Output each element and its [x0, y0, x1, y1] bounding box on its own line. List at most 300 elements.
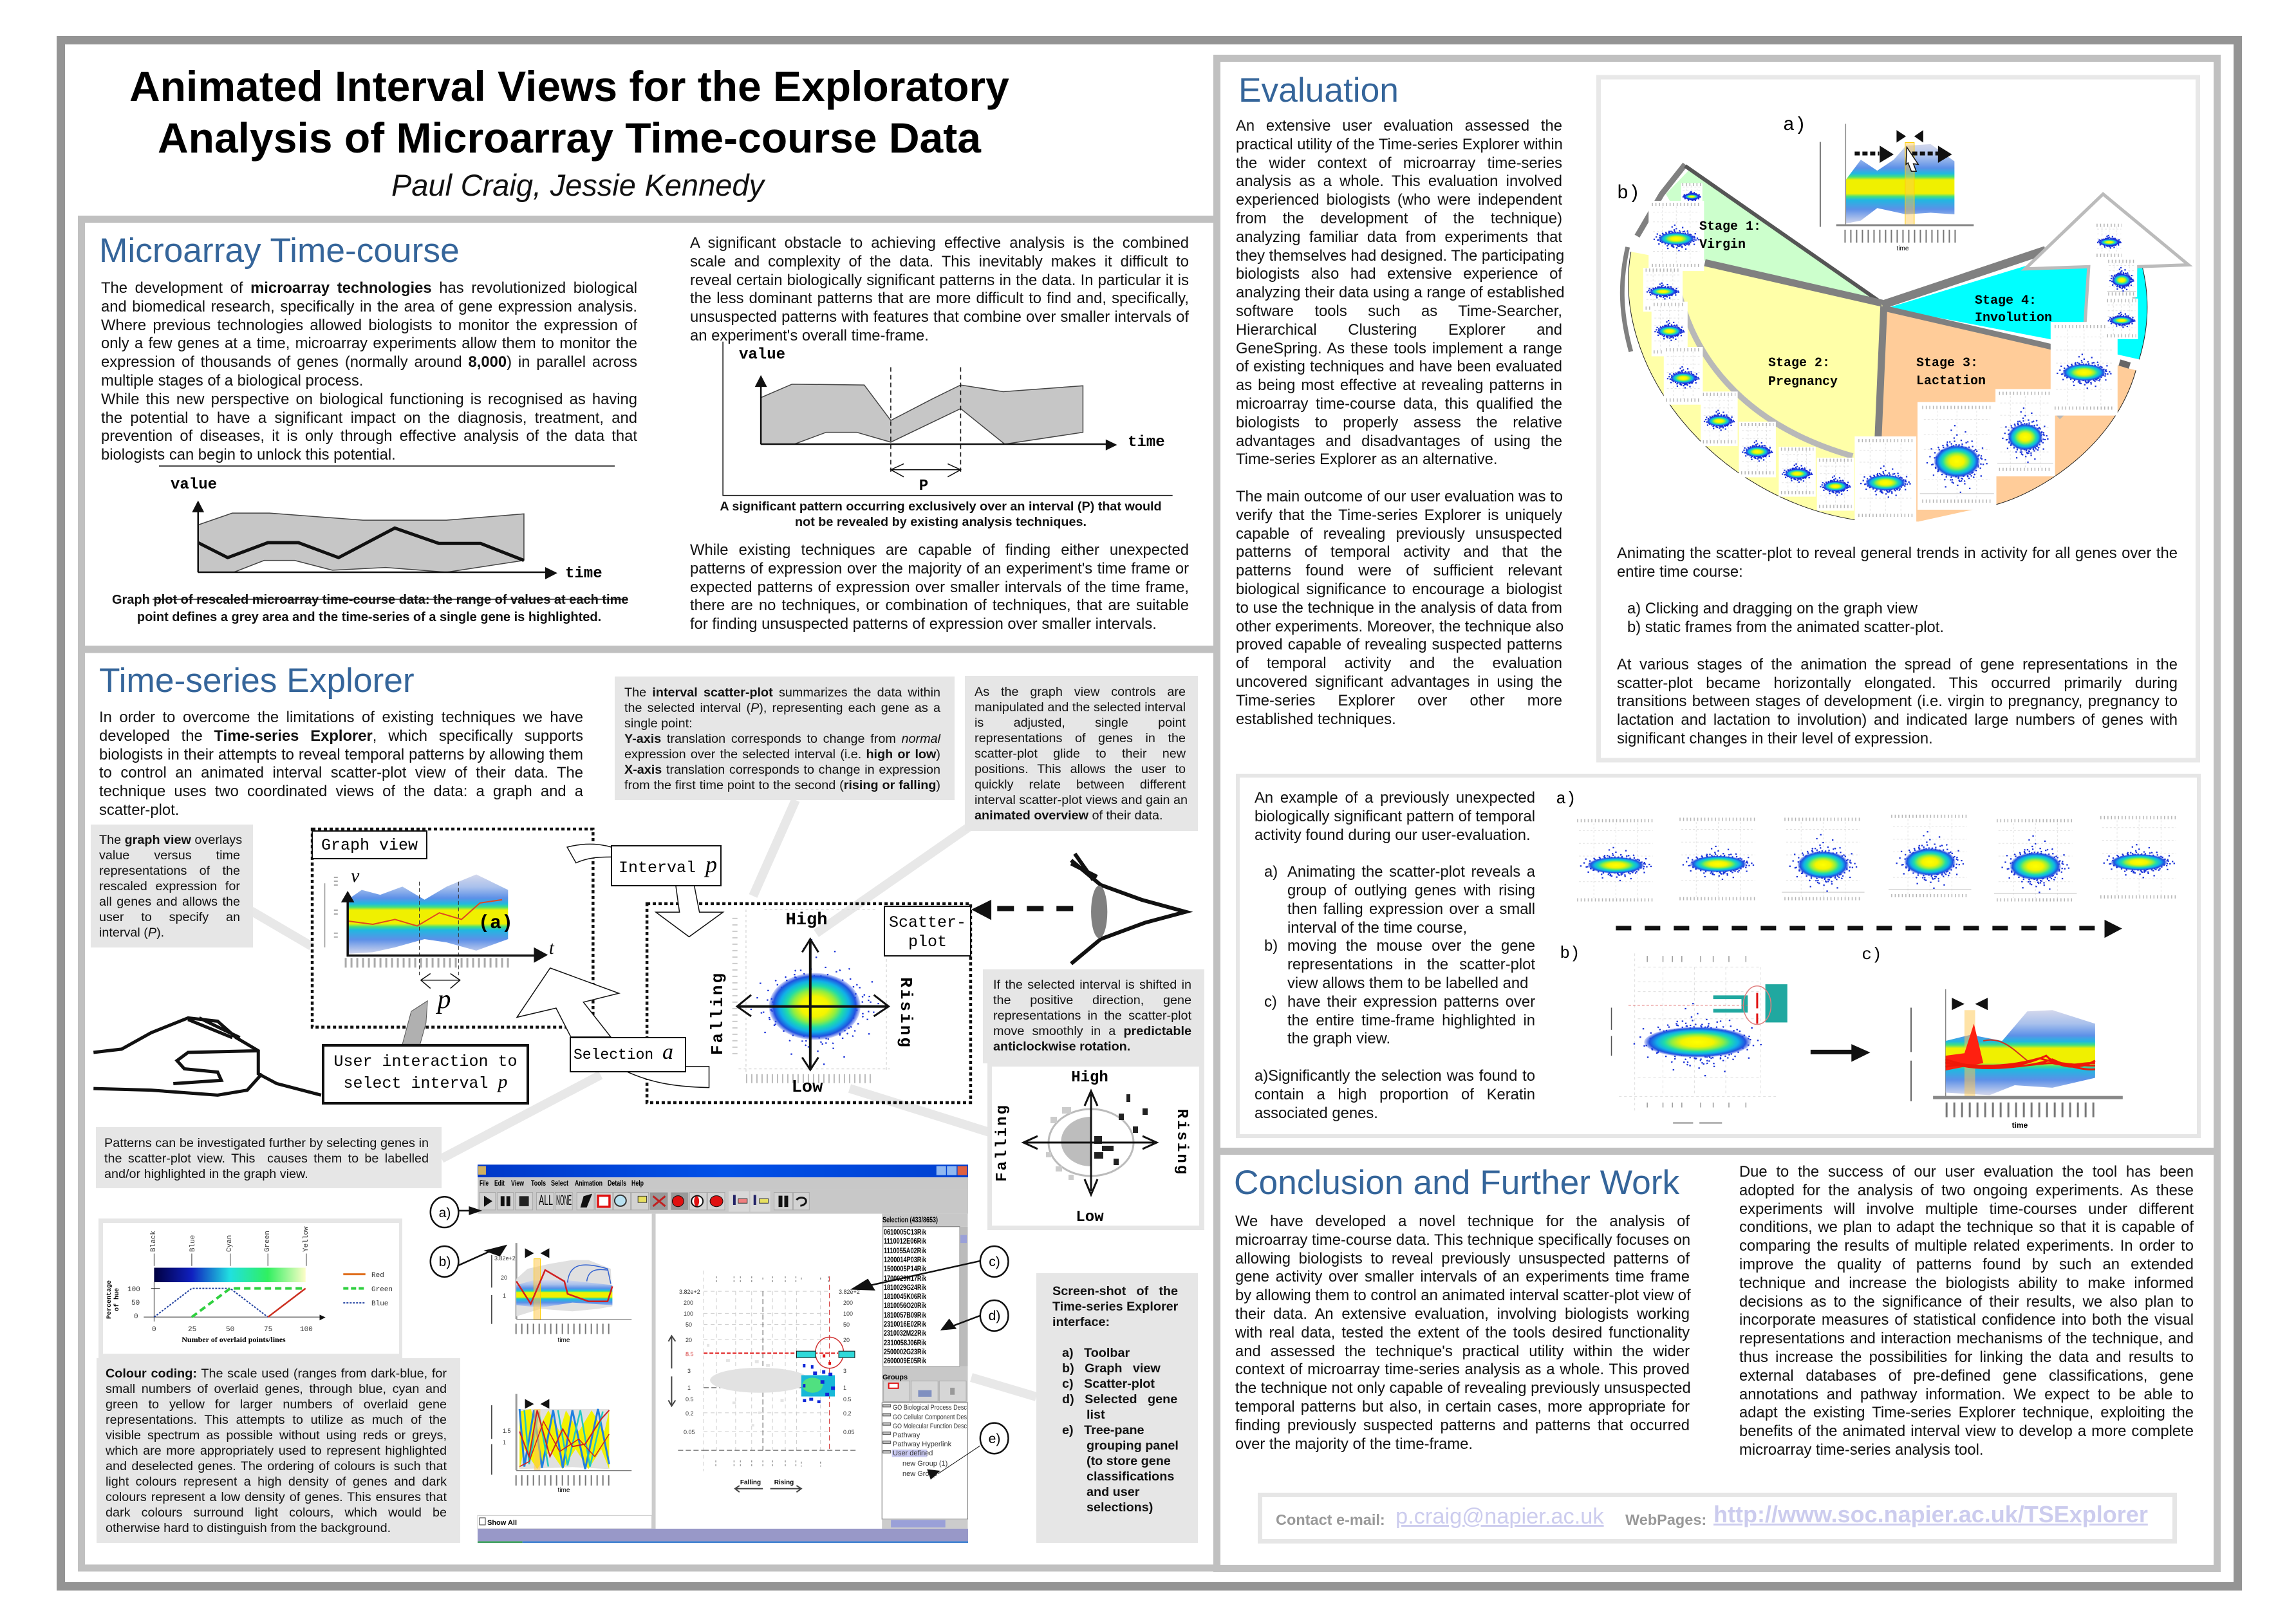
animation thumbnails [1643, 183, 2138, 522]
text: example pattern: Animating the scatter-plot reveals a [1287, 863, 1535, 881]
frame: example box [1236, 774, 2201, 1138]
callouts: screenshot letter markers: a) [439, 1206, 451, 1220]
title [129, 62, 1009, 162]
text: example pattern: view allows them to be labelled and [1287, 975, 1528, 992]
callout: screenshot legend: Time-series Explorer [1052, 1300, 1178, 1314]
figure: software screenshot: 100 [843, 1311, 853, 1317]
callout: screenshot legend: list [1087, 1408, 1105, 1422]
figure: significant pattern over interval P: value [739, 346, 785, 364]
text: evaluation: experienced biologists (who were independent [1236, 191, 1562, 209]
text: evaluation: biological significance to encourage a biologist [1236, 581, 1562, 598]
text: microarray intro: multiple stages of a biological process. [101, 372, 363, 389]
text: conclusion right column: adapt the existing Time-series Explorer technique, exploiting the [1739, 1404, 2194, 1421]
stage labels: Lactation [1916, 374, 1986, 389]
figure: example pattern animation and selection: a) [1556, 789, 1576, 808]
figure: software screenshot: 2600009E05Rik [884, 1356, 926, 1365]
text: evaluation: capable of revealing previously unsuspected [1236, 525, 1562, 543]
figure: colour scale: Red [371, 1272, 384, 1280]
text: contact details: WebPages: [1625, 1511, 1706, 1528]
arrow: selection to graph view [517, 968, 709, 1088]
frame: contact box [1260, 1495, 2174, 1541]
text: time-series intro: technique uses two coordinated views of the data: a graph and a [99, 783, 583, 800]
text: evaluation: of existing techniques and have been evaluated [1236, 358, 1562, 375]
icon: eye with dashed arrow [971, 854, 1186, 964]
graph one [516, 1243, 518, 1319]
callout: animated overview: positions. This allows the user to [975, 762, 1186, 776]
text: evaluation: uncovered significant advantages in using the [1236, 673, 1562, 691]
stage labels: Stage 1: [1699, 219, 1761, 234]
text: example pattern: the graph view. [1287, 1030, 1390, 1047]
text: evaluation: established techniques. [1236, 711, 1396, 727]
callout: graph view [91, 825, 253, 947]
text: evaluation: verify that the Time-series Explorer is uniquely [1236, 507, 1562, 524]
figure: software screenshot: Tools [531, 1179, 546, 1188]
text: animating scatter-plot: significant changes in their level of expression. [1617, 730, 1933, 747]
text: conclusion right column: representations and interaction mechanisms of the technique, and [1739, 1330, 2194, 1347]
heading: time-series explorer: Time-series Explorer [99, 662, 415, 700]
figure: software screenshot: GO Molecular Function Desc [893, 1423, 967, 1430]
figure: software screenshot: Pathway [893, 1432, 920, 1439]
callout: colour coding: colours represent a low density of genes. This ensures that [106, 1490, 447, 1504]
figure: software screenshot: ALL [539, 1192, 553, 1208]
figure: software screenshot: 200 [843, 1300, 853, 1306]
text: conclusion right column [1739, 1163, 2194, 1459]
text: evaluation: software tools such as Time-Searcher, [1236, 303, 1562, 320]
text: conclusion left column: We have developed a novel technique for the analysis of [1235, 1213, 1690, 1230]
text: conclusion left column: temporal patterns but also, in certain cases, more appropriate for [1235, 1398, 1690, 1415]
text: conclusion right column: annotations and pathway information. We expect to be able to [1739, 1386, 2194, 1403]
figure: stages pie with animation frames [1617, 115, 2189, 522]
callout: screenshot legend: (to store gene [1087, 1454, 1171, 1468]
figure: software screenshot: 1 [503, 1293, 506, 1299]
figure: colour scale: 0 [134, 1313, 138, 1321]
caption: value range graph: point defines a grey area and the time-series of a single gene is highlighted. [137, 610, 601, 624]
figure: colour scale: 25 [188, 1326, 196, 1334]
figure: colour scale: 50 [131, 1300, 140, 1307]
text: example pattern: activity found during our user-evaluation. [1255, 826, 1531, 844]
label: graph view [312, 831, 427, 859]
text: time-series intro: biologists in their attempts to reveal temporal patterns by allowing them [99, 746, 583, 763]
stage labels: Stage 2: [1768, 356, 1830, 371]
label: scatter-plot: plot [908, 933, 947, 951]
callout: interval scatter-plot [615, 677, 955, 800]
figure: software screenshot: 1 [503, 1439, 506, 1446]
callout: interval scatter-plot: Y-axis translation corresponds to change from normal [624, 732, 940, 746]
figure: value range graph with highlighted gene: value [171, 476, 217, 494]
figure: graph view diagram [312, 829, 593, 1044]
callout: colour coding: light colours represent a high density of genes and dark [106, 1475, 447, 1489]
figure: software screenshot: GO Biological Process Desc [893, 1404, 967, 1412]
figure: colour scale: Number of overlaid points/lines [182, 1335, 286, 1344]
label: user interaction [323, 1045, 528, 1103]
figure: stages pie with animation frames: a) [1783, 115, 1806, 136]
text: evaluation [1236, 117, 1565, 727]
text: animating scatter-plot: Animating the scatter-plot to reveal general trends in activity for all genes over the [1617, 545, 2178, 562]
text: contact details: Contact e-mail: [1276, 1511, 1385, 1528]
callout: colour coding: which are more appropriately used to represent highlighted [106, 1444, 447, 1458]
figure: software screenshot: new Group [902, 1470, 937, 1478]
text: conclusion right column: improve the quality of patterns found by such an extended [1739, 1256, 2194, 1273]
callout: screenshot legend: Screen-shot of the [1052, 1284, 1178, 1298]
label: graph view: Graph view [321, 836, 418, 855]
figure: software screenshot: Details [608, 1179, 626, 1188]
toolbar buttons [480, 1193, 809, 1210]
callout: colour coding: and deselected genes. The ordering of colours is such that [106, 1459, 447, 1473]
text: evaluation: biologists to properly assess the relative [1236, 414, 1562, 431]
callout: interval scatter-plot: X-axis translation corresponds to change in expression [624, 763, 940, 777]
figure: software screenshot: 100 [684, 1311, 693, 1317]
figure: software screenshot: 1500005P14Rik [884, 1264, 926, 1273]
figure: scatter-plot diagram: Low [792, 1078, 823, 1097]
text: conclusion left column: by allowing them to control an animated interval scatter-plot view of [1235, 1287, 1691, 1304]
heading: evaluation: Evaluation [1238, 71, 1399, 109]
text: conclusion left column: microarray time-course data. This technique specifically focuses on [1235, 1231, 1690, 1249]
figure: graph view diagram: (a) [478, 913, 513, 935]
callout: colour coding: Colour coding: The scale used (ranges from dark-blue, for [106, 1367, 447, 1381]
text: conclusion left column: with real data, tested the extent of the tools desired functionality [1235, 1324, 1690, 1341]
text: evaluation: advantages and disadvantages of using the [1236, 433, 1562, 450]
figure: software screenshot: 2310058J06Rik [884, 1338, 926, 1347]
figure: software screenshot: time [558, 1487, 570, 1494]
figure: software screenshot: 0.2 [843, 1410, 852, 1417]
callout: screenshot legend: a) Toolbar [1062, 1346, 1130, 1360]
text: evaluation: proved capable of revealing suspected patterns [1236, 636, 1562, 653]
panel: evaluation frame [1217, 58, 2217, 1151]
figure: software screenshot: Select [551, 1179, 568, 1188]
figure: software screenshot: 3 [687, 1368, 691, 1374]
callout: animated overview: animated overview of their data. [975, 808, 1162, 823]
callout: colour coding: dark colours surround light colours, which would be [106, 1506, 447, 1520]
figure: software screenshot: 3 [843, 1368, 846, 1374]
text: conclusion right column: external databases of pre-defined gene classifications, gene [1739, 1367, 2194, 1385]
text: example pattern: biologically significant pattern of temporal [1255, 808, 1535, 825]
callout: animated overview: scatter-plot glide to their new [975, 747, 1186, 761]
label: selection a: Selection a [574, 1040, 673, 1064]
text: evaluation: Hierarchical Clustering Explorer and [1236, 321, 1562, 339]
callout: anticlockwise rotation: the positive direction, gene [993, 993, 1191, 1007]
callout: animated overview: is adjusted, single point [975, 716, 1186, 730]
text: animating scatter-plot [1617, 545, 2178, 747]
figure: software screenshot: Show All [487, 1519, 517, 1527]
stage labels: Virgin [1699, 238, 1746, 252]
text: evaluation: microarray time-course data, this qualified the [1236, 395, 1562, 413]
text: animating scatter-plot: entire time course: [1617, 563, 1743, 581]
figure: stages pie with animation frames: b) [1617, 183, 1640, 205]
figure: colour scale: 75 [264, 1326, 272, 1334]
figure: software screenshot: 1110012E06Rik [884, 1237, 926, 1246]
heading: microarray time-course: Microarray Time-course [99, 232, 460, 270]
figure: graph view diagram: v [351, 865, 360, 886]
text: example pattern: the entire time-frame highlighted in [1287, 1012, 1535, 1029]
panes [652, 1214, 656, 1529]
callout: screenshot legend: c) Scatter-plot [1062, 1377, 1155, 1391]
figure: software screenshot: Pathway Hyperlink [893, 1441, 952, 1448]
callout: interval scatter-plot: from the first time point to the second (rising or falling) [624, 778, 940, 792]
text: example list letters: b) [1264, 937, 1278, 955]
text: example pattern [1255, 789, 1535, 1122]
figure: colour scale: Green [371, 1286, 393, 1294]
text: animating scatter-plot: a) Clicking and dragging on the graph view [1627, 600, 1918, 617]
caption: significant pattern [720, 499, 1162, 529]
figure: software screenshot: 3.82e+2 [839, 1289, 860, 1295]
figure: example pattern animation and selection: c) [1862, 945, 1882, 964]
figure: colour scale: 100 [127, 1286, 140, 1294]
text: conclusion right column: conditions, we plan to adapt the technique so that it is capable of [1739, 1218, 2194, 1236]
text: time-series intro: developed the Time-series Explorer, which specifically supports [99, 727, 583, 745]
figure: example pattern animation and selection [1556, 789, 2179, 1130]
text: existing techniques: there are no techniques, or combination of techniques, that are suitable [690, 597, 1189, 614]
text: example list letters [1264, 863, 1278, 1011]
stage labels: Involution [1975, 311, 2052, 326]
figure: software screenshot: 1810057B09Rik [884, 1311, 926, 1320]
figure: scatter-plot diagram [567, 844, 971, 1103]
figure: software screenshot: 2310016E02Rik [884, 1320, 926, 1329]
authors: Paul Craig, Jessie Kennedy [391, 168, 764, 202]
figure: colour scale: Blue [189, 1235, 197, 1252]
callout: graph view: representations of the [99, 864, 240, 878]
figure: scatter-plot diagram: Falling [708, 971, 727, 1055]
scatter plot [704, 1271, 830, 1471]
callout: screenshot legend: classifications [1087, 1470, 1174, 1484]
text: conclusion left column: their data. An extensive evaluation, involving biologists working [1235, 1305, 1690, 1323]
stage labels: Pregnancy [1768, 375, 1838, 389]
text: analysis obstacle: reveal certain biologically significant patterns in the data. In particular it is [690, 272, 1189, 289]
text: conclusion right column: decisions as to the significance of their results, we also plan to [1739, 1293, 2194, 1311]
figure: software screenshot: 1810029G24Rik [884, 1283, 926, 1292]
text: analysis obstacle: the less dominant patterns that are more difficult to find and, specifically, [690, 290, 1189, 307]
callout: animated overview [965, 676, 1198, 831]
text: microarray intro [101, 279, 637, 463]
figure: example pattern animation and selection: b) [1560, 944, 1580, 963]
text: example pattern: group of outlying genes with rising [1287, 882, 1535, 899]
text: animating scatter-plot: b) static frames from the animated scatter-plot. [1627, 619, 1944, 636]
figure: software screenshot: 200 [684, 1300, 693, 1306]
text: example list letters: c) [1264, 993, 1277, 1011]
figure: software screenshot: Edit [494, 1179, 505, 1188]
callout: graph view: user to specify an [99, 910, 240, 924]
figure: software screenshot: View [511, 1179, 524, 1188]
stage labels: Stage 3: [1916, 356, 1978, 371]
callout: selecting genes [96, 1127, 442, 1188]
text: analysis obstacle: scale and complexity of the data. This inevitably makes it difficult to [690, 253, 1189, 270]
callouts: screenshot letter markers: c) [989, 1255, 1000, 1269]
highlighted graph [1945, 989, 1946, 1097]
text: analysis obstacle: unsuspected patterns with features that combine over smaller intervals of [690, 308, 1189, 326]
callout: animated overview: representations of genes in the [975, 731, 1186, 745]
figure: software screenshot: 1.5 [503, 1428, 511, 1434]
text: analysis obstacle: A significant obstacle to achieving effective analysis is the combined [690, 234, 1189, 252]
text: time-series intro: scatter-plot. [99, 801, 179, 819]
figure: significant pattern over interval P [723, 342, 1173, 496]
callout: interval scatter-plot: the selected interval (P), representing each gene as a [624, 701, 940, 715]
figure: colour scale [98, 1218, 402, 1358]
text: example pattern: associated genes. [1255, 1105, 1378, 1122]
text: microarray intro: Where previous technologies allowed biologists to monitor the expression of [101, 317, 637, 334]
text: example pattern: interval of the time course, [1287, 919, 1467, 937]
caption: value range graph: Graph plot of rescaled microarray time-course data: the range of values at each time [112, 593, 628, 607]
figure: scatter-plot diagram: Rising [896, 977, 915, 1049]
text: conclusion left column: over the majority of the time-frame. [1235, 1435, 1473, 1453]
text: contact details: p.craig@napier.ac.uk [1395, 1504, 1604, 1529]
text: existing techniques: While existing techniques are capable of finding either unexpected [690, 541, 1189, 559]
figure: software screenshot: Selection (433/8653) [882, 1215, 938, 1224]
callout: colour coding [97, 1358, 460, 1543]
figure: scatter-plot diagram: High [786, 911, 827, 930]
callout connector lines [251, 800, 1036, 1397]
text: microarray intro: biologists can begin to unlock this potential. [101, 446, 396, 463]
figure: colour scale: Green [264, 1231, 272, 1252]
figure: software screenshot: Animation [575, 1179, 602, 1188]
text: animating scatter-plot: transitions between stages of development (i.e. virgin to pregnancy, pregnancy to [1617, 693, 2178, 710]
text: evaluation: patterns of temporal activity and that the [1236, 543, 1562, 561]
text: evaluation: other experiments. Moreover, the technique also [1236, 618, 1563, 635]
text: microarray intro: and biomedical research, specifically in the area of gene expression analysis. [101, 298, 637, 315]
text: evaluation: to use the technique in the analysis of data from [1236, 599, 1562, 617]
text: conclusion right column: experiments will involve multiple time-courses under different [1739, 1200, 2194, 1218]
text: evaluation: biologists also had extensive experience of [1236, 265, 1562, 283]
callout: selecting genes: and/or highlighted in the graph view. [104, 1167, 308, 1181]
mini graph with interval animation [1820, 124, 1974, 236]
figure: colour scale: Percentage [106, 1280, 113, 1319]
text: time-series intro: to control an animated interval scatter-plot view of their data. The [99, 764, 583, 781]
figure: software screenshot: 1700029H17Rik [884, 1274, 926, 1283]
text: time-series intro: In order to overcome the limitations of existing techniques we have [99, 709, 583, 726]
figure: anticlockwise rotation: Falling [994, 1103, 1011, 1182]
figure: software screenshot: 20 [843, 1337, 850, 1343]
text: conclusion left column [1235, 1213, 1691, 1453]
text: evaluation: analyzing their data using a range of established [1236, 284, 1565, 301]
text: evaluation: they themselves had designed. The participating [1236, 247, 1564, 265]
figure: significant pattern over interval P: P [919, 478, 928, 495]
figure: software screenshot: time [558, 1337, 570, 1344]
text: evaluation: practical utility of the Time-series Explorer within [1236, 136, 1563, 153]
text: example pattern: moving the mouse over the gene [1287, 937, 1535, 955]
figure: software screenshot: GO Cellular Component Des [893, 1414, 967, 1421]
text: conclusion right column: adopted for the analysis of two ongoing experiments. As these [1739, 1182, 2194, 1199]
text: microarray intro: While this new perspective on biological functioning is recognised as having [101, 391, 637, 408]
text: evaluation: Time-series Explorer over other more [1236, 692, 1562, 709]
text: existing techniques: for finding unsuspected patterns of expression over smaller intervals. [690, 615, 1157, 633]
text: example pattern: An example of a previously unexpected [1255, 789, 1535, 807]
callout: animated overview: manipulated and the selected interval [975, 700, 1186, 714]
text: example pattern: then falling expression over a small [1287, 901, 1535, 918]
callouts: screenshot letter markers [431, 1197, 1008, 1480]
text: evaluation: as being most effective at revealing patterns in [1236, 377, 1562, 394]
figure: software screenshot: 1200014P03Rik [884, 1255, 926, 1264]
panel: conclusion frame [1217, 1151, 2217, 1568]
text: conclusion left column: finding previously suspected patterns and patterns that occurred [1235, 1417, 1690, 1434]
callout: screenshot legend: d) Selected gene [1062, 1392, 1177, 1406]
callouts: screenshot letter markers: b) [439, 1255, 451, 1269]
callout: interval scatter-plot: single point: [624, 716, 693, 731]
text: example pattern: have their expression patterns over [1287, 993, 1535, 1011]
text: evaluation: An extensive user evaluation assessed the [1236, 117, 1562, 135]
text: microarray intro: expression of thousands of genes (normally around 8,000) in parallel across [101, 353, 637, 371]
heading: conclusion: Conclusion and Further Work [1234, 1164, 1679, 1202]
title: Analysis of Microarray Time-course Data [158, 114, 981, 162]
figure: anticlockwise rotation [987, 1062, 1204, 1230]
callout: anticlockwise rotation: representations in the scatter-plot [993, 1009, 1191, 1023]
figure: software screenshot: 20 [501, 1274, 507, 1281]
callouts: screenshot letter markers: d) [989, 1309, 1000, 1323]
figure: colour scale: Cyan [226, 1235, 234, 1252]
callout: screenshot legend: interface: [1052, 1315, 1110, 1329]
panel: microarray time-course frame [81, 219, 1217, 649]
callout: anticlockwise rotation [983, 969, 1204, 1063]
figure: software screenshot [478, 1164, 968, 1543]
text: evaluation: patterns found were of sufficient relevant [1236, 562, 1562, 579]
text: existing techniques: patterns of expression over the majority of an experiment's time frame or [690, 560, 1189, 577]
title: Animated Interval Views for the Exploratory [129, 62, 1009, 110]
figure: software screenshot: Groups [882, 1374, 908, 1381]
label: interval p [611, 846, 721, 886]
figure: software screenshot: 0.2 [686, 1410, 694, 1417]
figure: software screenshot: File [480, 1179, 489, 1188]
figure: value range graph with highlighted gene: time [565, 565, 602, 583]
label: user interaction: select interval p [343, 1071, 508, 1093]
text: analysis obstacle: an experiment's overall time-frame. [690, 327, 929, 344]
text: contact details [1276, 1501, 2148, 1529]
figure: example pattern animation and selection: time [2012, 1121, 2028, 1130]
figure: value range graph with highlighted gene [153, 466, 626, 599]
figure: colour scale: 0 [152, 1326, 156, 1334]
figure: colour scale: Yellow [303, 1226, 310, 1252]
callout: graph view: all genes and allows the [99, 895, 240, 909]
graph two [516, 1394, 518, 1470]
text: conclusion right column: benefits of the animated interval view to develop a more complete [1739, 1423, 2194, 1440]
text: analysis obstacle [690, 234, 1190, 344]
text: conclusion left column: allowing biologists to reveal previously unsuspected patterns of [1235, 1250, 1690, 1267]
text: animating scatter-plot: lactation and lactation to involution) and indicated large numbers of genes with [1617, 711, 2178, 729]
text: conclusion right column: incorporate measures of statistical confidence into both the visual [1739, 1311, 2194, 1329]
text: example pattern: representations in the scatter-plot [1287, 956, 1535, 973]
stage labels: Stage 4: [1975, 294, 2037, 308]
text: evaluation: Time-series Explorer as an alternative. [1236, 451, 1497, 468]
text: evaluation: GeneSpring. As these tools implement a range [1236, 340, 1562, 357]
callout: graph view: rescaled expression for [99, 879, 240, 893]
callout: screenshot legend: and user [1087, 1485, 1139, 1499]
text: time-series intro [99, 709, 583, 819]
label: user interaction: User interaction to [333, 1052, 518, 1071]
figure: colour scale: Blue [371, 1300, 388, 1308]
text: evaluation: analysis as a whole. This evaluation involved [1236, 173, 1562, 190]
callout: colour coding: small numbers of overlaid genes, through blue, cyan and [106, 1382, 447, 1396]
figure: significant pattern over interval P: time [1128, 434, 1165, 451]
callout: animated overview: As the graph view controls are [975, 685, 1186, 699]
figure: anticlockwise rotation: High [1071, 1069, 1108, 1087]
text: conclusion right column: thus increase the possibilities for linking the data and results to [1739, 1349, 2194, 1366]
figure: software screenshot: 50 [843, 1321, 850, 1328]
callout: selecting genes: the scatter-plot view. This causes them to be labelled [104, 1152, 429, 1166]
callout: screenshot legend: grouping panel [1087, 1439, 1179, 1453]
panel: time-series explorer frame [81, 649, 1217, 1568]
selection scatter [1619, 953, 1776, 1111]
figure: stages pie with animation frames: time [1897, 245, 1909, 252]
stage labels [1699, 219, 2052, 389]
text: evaluation: The main outcome of our user evaluation was to [1236, 488, 1563, 505]
figure: software screenshot: 1 [843, 1385, 846, 1391]
callouts: screenshot letter markers: e) [989, 1432, 1000, 1446]
callout: anticlockwise rotation: move smoothly in a predictable [993, 1024, 1191, 1038]
caption: significant pattern: not be revealed by existing analysis techniques. [795, 515, 1087, 529]
figure: software screenshot: 1 [687, 1385, 691, 1391]
text: animating scatter-plot: At various stages of the animation the spread of gene representations in the [1617, 656, 2178, 673]
callout: screenshot legend: selections) [1087, 1500, 1153, 1515]
label: selection a [570, 1038, 686, 1072]
callout: graph view: value versus time [99, 848, 240, 863]
label: scatter-plot: Scatter- [889, 913, 966, 932]
label: interval p: Interval p [619, 852, 717, 877]
